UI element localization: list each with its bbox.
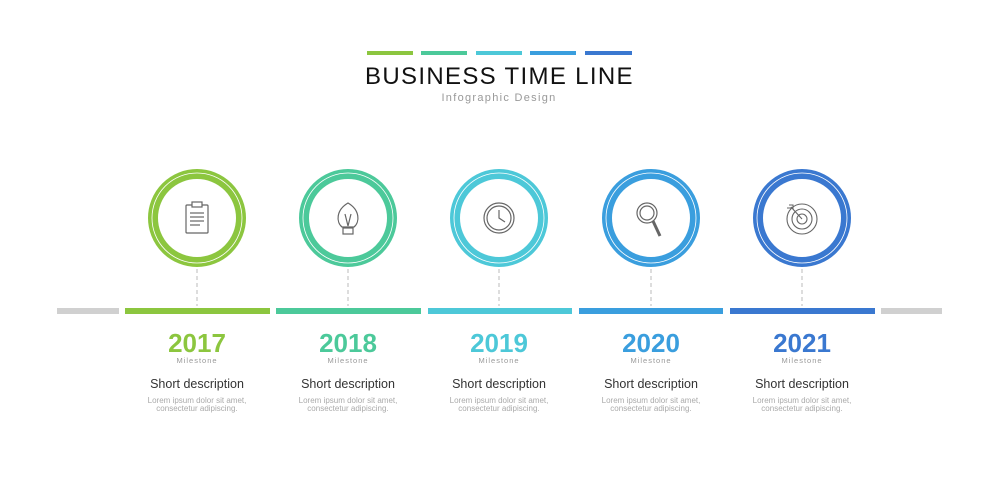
milestone 2017: Short description — [150, 377, 244, 391]
milestone 2020: Short description — [604, 377, 698, 391]
milestone 2017: consectetur adipiscing. — [156, 404, 238, 413]
milestone 2017: 2017 — [168, 328, 226, 358]
milestone 2019 — [450, 173, 548, 413]
subtitle: Infographic Design — [441, 92, 557, 104]
timeline bar — [57, 308, 942, 314]
title: BUSINESS TIME LINE — [365, 63, 633, 90]
milestone 2021: 2021 — [773, 328, 831, 358]
milestone 2021: Short description — [755, 377, 849, 391]
milestone 2018: 2018 — [319, 328, 377, 358]
milestone 2019: Milestone — [478, 356, 520, 365]
icon: magnifier — [637, 203, 660, 236]
milestone 2020: 2020 — [622, 328, 680, 358]
milestone 2019: 2019 — [470, 328, 528, 358]
milestone 2017: Lorem ipsum dolor sit amet, — [148, 396, 246, 405]
milestone 2018 — [299, 173, 397, 413]
milestone 2020 — [602, 173, 700, 413]
icon: clipboard — [186, 202, 208, 233]
icon: clock — [484, 203, 514, 233]
milestone 2018: Short description — [301, 377, 395, 391]
icon: target — [787, 204, 817, 234]
milestone 2019: Short description — [452, 377, 546, 391]
milestone 2018: consectetur adipiscing. — [307, 404, 389, 413]
header color bars — [367, 51, 632, 55]
milestone 2020: Milestone — [630, 356, 672, 365]
icon: light bulb — [338, 203, 358, 234]
milestone 2017: Milestone — [176, 356, 218, 365]
milestone 2018: Milestone — [327, 356, 369, 365]
milestone 2019: Lorem ipsum dolor sit amet, — [450, 396, 548, 405]
milestone 2021: consectetur adipiscing. — [761, 404, 843, 413]
milestone 2021: Lorem ipsum dolor sit amet, — [753, 396, 851, 405]
milestone 2019: consectetur adipiscing. — [458, 404, 540, 413]
milestone 2020: consectetur adipiscing. — [610, 404, 692, 413]
milestone 2018: Lorem ipsum dolor sit amet, — [299, 396, 397, 405]
milestone 2021 — [753, 173, 851, 413]
milestone 2017 — [148, 173, 246, 413]
milestone 2020: Lorem ipsum dolor sit amet, — [602, 396, 700, 405]
milestone 2021: Milestone — [781, 356, 823, 365]
